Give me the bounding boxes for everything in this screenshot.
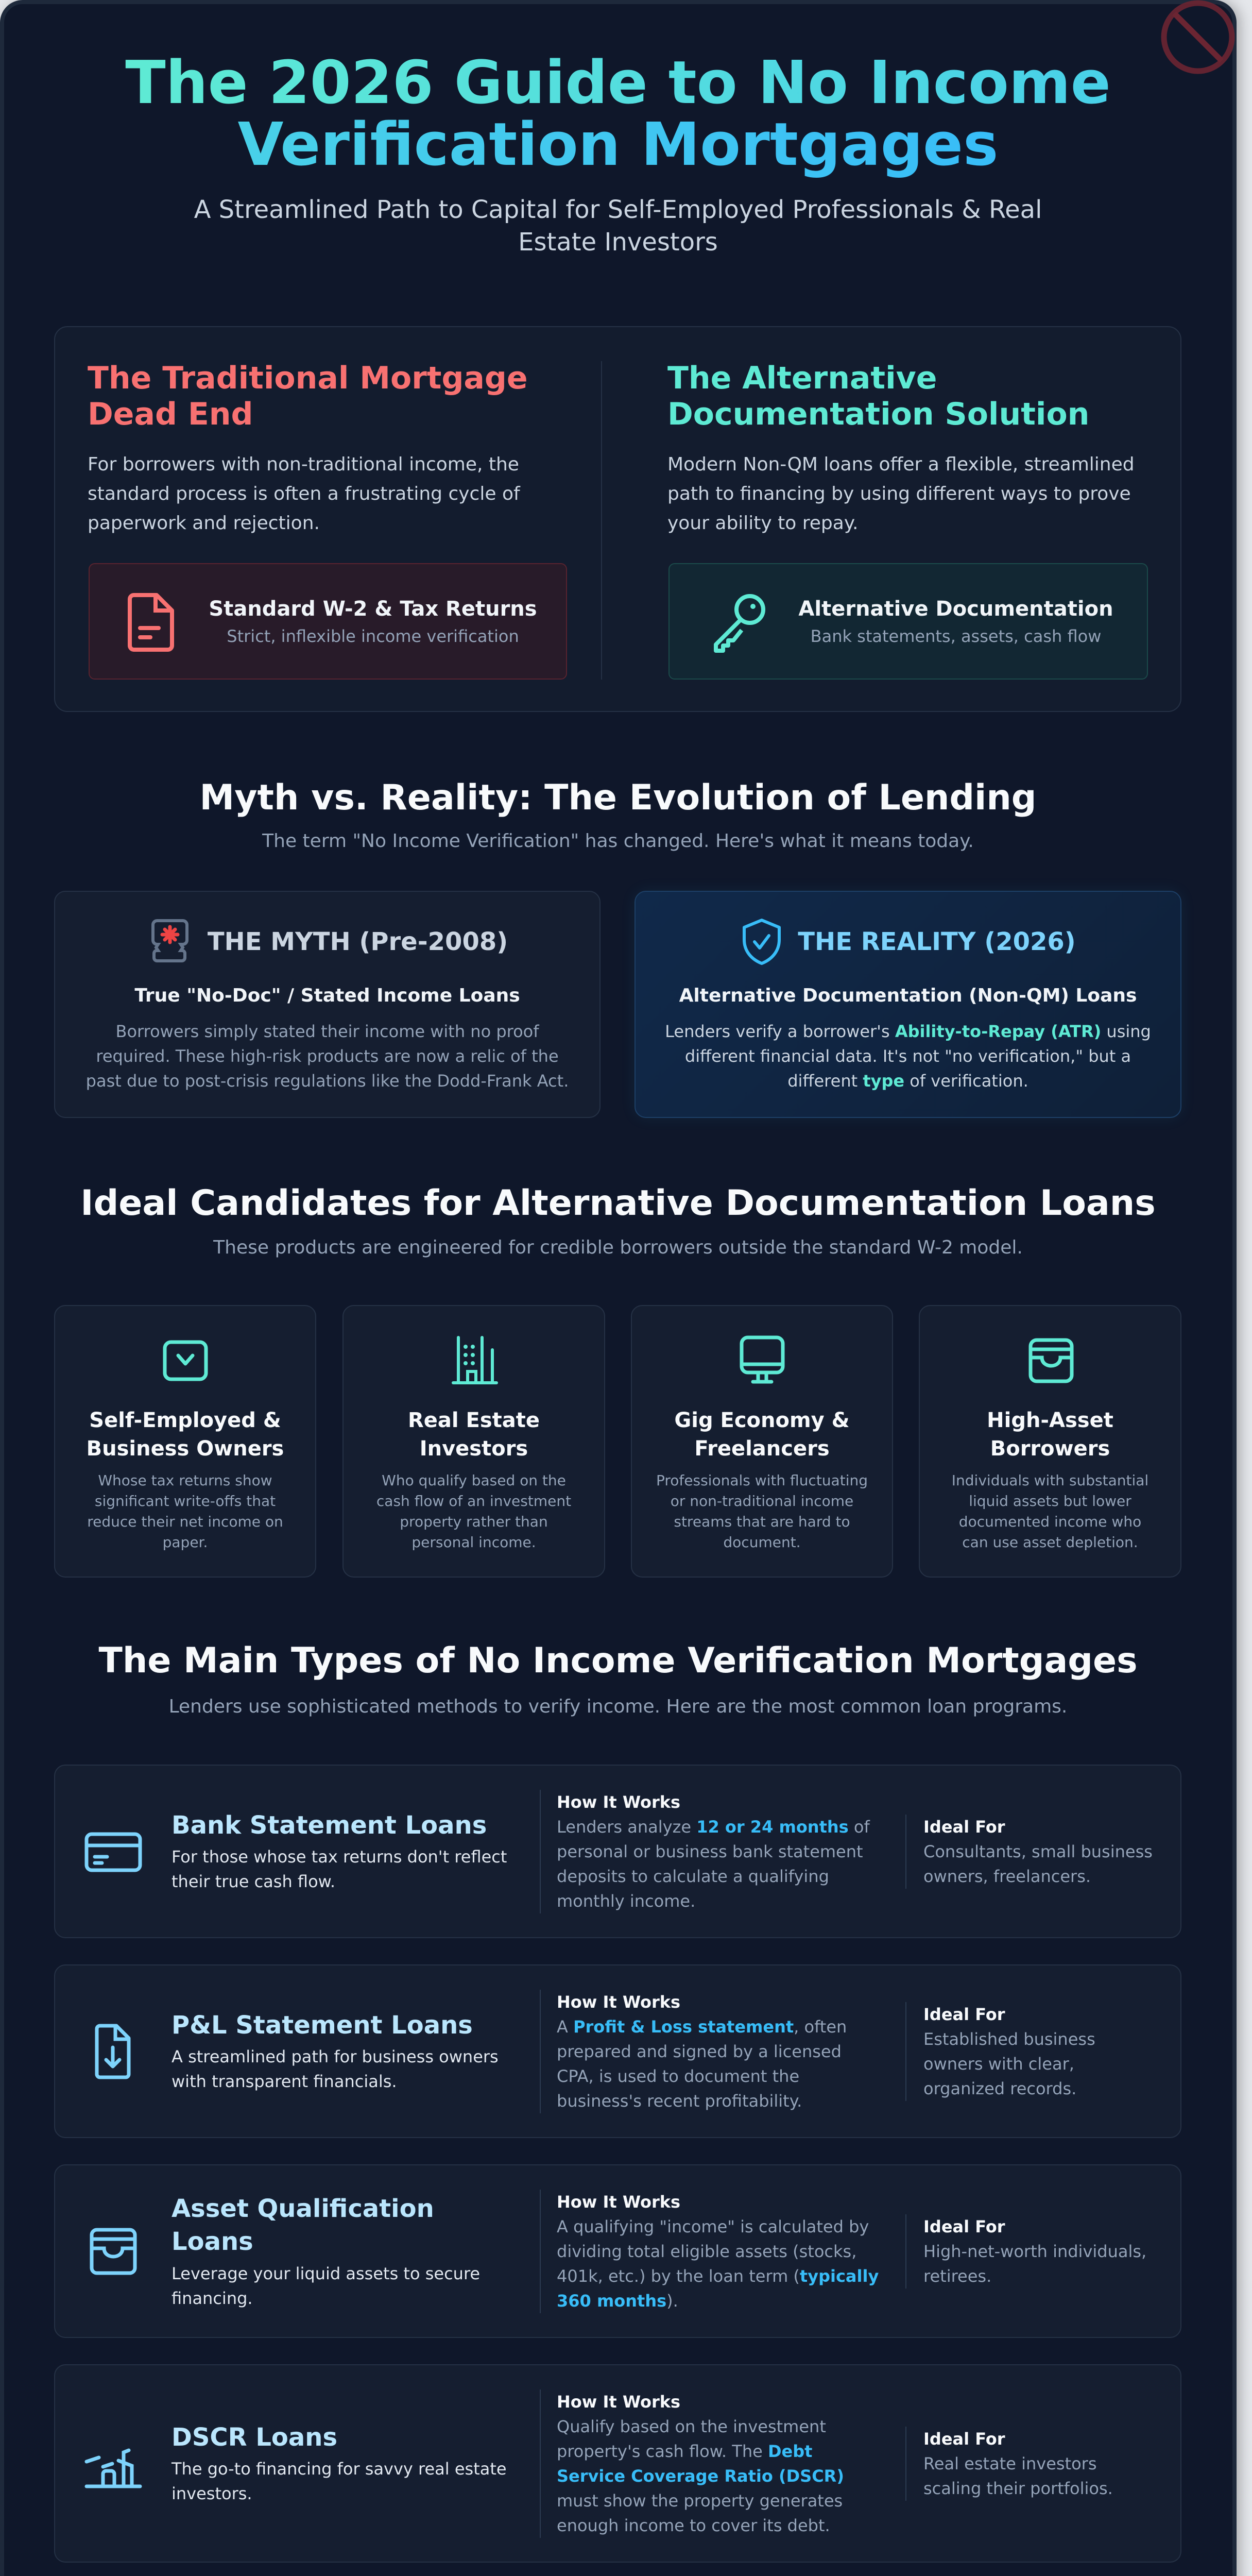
text: real estate desc: personal income. [411, 1534, 536, 1551]
column: P&L ideal for: owners with clear, [923, 2054, 1074, 2073]
subheading: ideal candidates: These products are engineered for credible borrowers outside the standard W-2 model. [213, 1237, 1023, 1258]
text: high-asset desc: documented income who [959, 1513, 1141, 1530]
column: P&L how it works [540, 1990, 905, 2113]
text: gig title: Gig Economy & [674, 1409, 850, 1432]
column: bank statement how it works: personal or business bank statement [557, 1841, 863, 1861]
column: DSCR how it works: How It Works [557, 2392, 680, 2411]
column: P&L ideal for: Ideal For [923, 2004, 1005, 2024]
text: alternative body: your ability to repay. [667, 513, 858, 534]
column: DSCR how it works: Qualify based on the investment [557, 2416, 826, 2436]
text: real estate desc [344, 1470, 604, 1553]
text: high-asset title: High-Asset [987, 1409, 1113, 1432]
text: high-asset desc [920, 1470, 1180, 1553]
column: asset qualification name: financing. [171, 2289, 253, 2308]
text: gig desc [632, 1470, 892, 1553]
column: DSCR ideal for: Ideal For [923, 2429, 1005, 2448]
text: high-asset desc: can use asset depletion. [962, 1534, 1138, 1551]
icon: credit card [84, 1823, 142, 1880]
text: myth subtitle: True "No-Doc" / Stated Income Loans [134, 985, 520, 1006]
panel: the reality [634, 891, 1181, 1118]
icon: property chart [84, 2435, 142, 2493]
card: DSCR loans [54, 2364, 1181, 2563]
column: bank statement ideal for: owners, freelancers. [923, 1866, 1091, 1886]
header: the myth: THE MYTH (Pre-2008) [208, 927, 508, 956]
text: self-employed desc [87, 1472, 283, 1551]
column: asset qualification name: Asset Qualification [171, 2194, 434, 2223]
card: asset qualification loans [54, 2164, 1181, 2338]
subtitle [194, 195, 1042, 257]
column: P&L how it works: How It Works [557, 1992, 680, 2011]
text: standard W-2: Standard W-2 & Tax Returns [209, 597, 537, 621]
text: reality body: Lenders verify a borrower's Ability-to-Repay (ATR) using [665, 1022, 1151, 1041]
column: asset how it works: How It Works [557, 2192, 680, 2211]
icon: briefcase check [163, 1341, 208, 1381]
column: asset how it works: dividing total eligible assets (stocks, [557, 2241, 856, 2261]
column: P&L how it works: prepared and signed by a licensed [557, 2041, 842, 2061]
right column: alternative solution [667, 360, 1148, 680]
column: P&L name: with transparent financials. [171, 2071, 397, 2091]
panel: the myth [54, 891, 601, 1118]
title: Verification Mortgages [238, 110, 998, 179]
text: alternative documentation [798, 597, 1113, 646]
column: P&L how it works: business's recent profitability. [557, 2091, 802, 2110]
column: asset ideal for [905, 2214, 1146, 2289]
card: high-asset [919, 1305, 1181, 1578]
column: DSCR name [55, 2421, 540, 2506]
column: bank statement ideal for: Consultants, small business [923, 1841, 1153, 1861]
text: reality body: different financial data. It's not "no verification," but a [685, 1046, 1131, 1066]
column: asset how it works: 401k, etc.) by the loan term (typically [557, 2266, 879, 2285]
text: alternative body: Modern Non-QM loans offer a flexible, streamlined [667, 454, 1135, 475]
column: P&L ideal for: organized records. [923, 2078, 1076, 2098]
text: self-employed desc: Whose tax returns show [98, 1472, 272, 1489]
heading: main types: The Main Types of No Income Verification Mortgages [98, 1640, 1138, 1681]
column: P&L name [55, 2009, 540, 2094]
card: real estate investors [342, 1305, 605, 1578]
text: real estate desc: cash flow of an investment [376, 1493, 571, 1510]
text: alternative documentation: Bank statements, assets, cash flow [811, 626, 1101, 646]
text: real estate title: Investors [420, 1437, 528, 1461]
text: self-employed desc: paper. [163, 1534, 208, 1551]
text: reality body [665, 1022, 1151, 1091]
text: gig desc: Professionals with fluctuating [656, 1472, 868, 1489]
heading: alternative solution: Documentation Solution [667, 396, 1089, 432]
card: P&L statement loans [54, 1964, 1181, 2138]
subtitle: Estate Investors [518, 228, 718, 257]
text: real estate title: Real Estate [408, 1409, 540, 1432]
column: asset ideal for: High-net-worth individuals, [923, 2241, 1146, 2261]
heading: ideal candidates: Ideal Candidates for Alternative Documentation Loans [80, 1183, 1156, 1224]
text: real estate desc: Who qualify based on the [382, 1472, 566, 1489]
column: DSCR name: DSCR Loans [171, 2422, 337, 2451]
column: DSCR name: The go-to financing for savvy real estate [171, 2459, 507, 2478]
column: P&L how it works: A Profit & Loss statement, often [557, 2016, 847, 2036]
icon: document [128, 593, 174, 652]
text: real estate title [408, 1409, 540, 1461]
column: bank statement name [55, 1809, 540, 1894]
column: DSCR ideal for [905, 2427, 1113, 2501]
column: bank statement name: their true cash flow. [171, 1871, 335, 1891]
column: DSCR how it works: enough income to cover its debt. [557, 2515, 830, 2535]
card: gig economy [631, 1305, 893, 1578]
column: asset ideal for: retirees. [923, 2266, 991, 2285]
text: traditional body: paperwork and rejection. [88, 513, 320, 534]
column: P&L name: P&L Statement Loans [171, 2010, 473, 2039]
text: gig title: Freelancers [694, 1437, 830, 1461]
text: traditional body: standard process is often a frustrating cycle of [88, 483, 520, 504]
text: myth body: required. These high-risk products are now a relic of the [96, 1046, 559, 1066]
text: traditional body [88, 454, 520, 534]
icon: broken badge [151, 919, 188, 962]
column: DSCR how it works: property's cash flow. The Debt [557, 2441, 812, 2461]
heading: alternative solution [667, 360, 1089, 432]
subheading: myth vs reality: The term "No Income Verification" has changed. Here's what it means today. [262, 831, 974, 852]
icon: monitor [738, 1334, 787, 1386]
callout: standard W-2 [89, 563, 567, 680]
column: asset qualification name: Loans [171, 2227, 253, 2256]
column: bank statement how it works [540, 1790, 905, 1913]
card: self-employed [54, 1305, 316, 1578]
heading: traditional dead end: The Traditional Mortgage [88, 360, 528, 396]
text: myth body: past due to post-crisis regulations like the Dodd-Frank Act. [86, 1071, 569, 1091]
icon: file download [84, 2023, 142, 2080]
column: DSCR ideal for: Real estate investors [923, 2453, 1097, 2473]
column: DSCR name: investors. [171, 2483, 252, 2503]
text: self-employed desc: significant write-offs that [95, 1493, 276, 1510]
header: the reality [743, 919, 1076, 965]
left column: traditional mortgage [88, 360, 567, 680]
heading: traditional dead end: Dead End [88, 396, 253, 432]
heading: myth vs reality: Myth vs. Reality: The Evolution of Lending [200, 777, 1036, 818]
callout: alternative documentation [668, 563, 1148, 680]
subtitle: A Streamlined Path to Capital for Self-Employed Professionals & Real [194, 195, 1042, 224]
column: DSCR how it works [540, 2389, 905, 2538]
subheading: main types: Lenders use sophisticated methods to verify income. Here are the most common loan programs. [169, 1696, 1067, 1717]
text: self-employed title [87, 1409, 284, 1461]
text: gig desc: streams that are hard to [674, 1513, 850, 1530]
column: asset qualification name: Leverage your liquid assets to secure [171, 2264, 480, 2283]
title [125, 48, 1111, 179]
text: high-asset desc: liquid assets but lower [969, 1493, 1131, 1510]
text: self-employed desc: reduce their net income on [87, 1513, 283, 1530]
text: self-employed title: Business Owners [87, 1437, 284, 1461]
icon: building [452, 1336, 498, 1384]
column: P&L how it works: CPA, is used to document the [557, 2066, 799, 2086]
text: traditional body: For borrowers with non-traditional income, the [88, 454, 519, 475]
header: the reality: THE REALITY (2026) [798, 927, 1076, 956]
text: self-employed title: Self-Employed & [89, 1409, 281, 1432]
text: myth body: Borrowers simply stated their income with no proof [115, 1022, 539, 1041]
column: asset ideal for: Ideal For [923, 2216, 1005, 2236]
icon: key [714, 594, 765, 653]
column: P&L name: A streamlined path for business owners [171, 2046, 499, 2066]
text: real estate desc: property rather than [400, 1513, 548, 1530]
column: asset how it works [540, 2190, 905, 2313]
column: bank statement ideal for [905, 1815, 1153, 1889]
text: reality subtitle: Alternative Documentation (Non-QM) Loans [679, 985, 1137, 1006]
column: bank statement name: Bank Statement Loans [171, 1810, 487, 1839]
text: gig desc: or non-traditional income [671, 1493, 853, 1510]
column: bank statement how it works: Lenders analyze 12 or 24 months of [557, 1817, 870, 1836]
column: DSCR ideal for: scaling their portfolios. [923, 2478, 1113, 2498]
icon: archive [84, 2223, 142, 2280]
heading: alternative solution: The Alternative [667, 360, 937, 396]
card: bank statement loans [54, 1765, 1181, 1938]
column: DSCR how it works: must show the property generates [557, 2490, 843, 2510]
icon: shield check [743, 919, 781, 965]
text: alternative body [667, 454, 1135, 534]
text: reality body: different type of verification. [787, 1071, 1028, 1091]
icon: decorative prohibition sign [1161, 0, 1235, 74]
panel: traditional vs alternative [54, 326, 1181, 712]
header: the myth [151, 919, 508, 962]
column: bank statement name: For those whose tax returns don't reflect [171, 1846, 507, 1866]
text: high-asset title: Borrowers [990, 1437, 1110, 1461]
icon: archive box [1026, 1336, 1076, 1385]
text: gig desc: document. [723, 1534, 801, 1551]
text: standard W-2 [209, 597, 537, 646]
heading: traditional dead end [88, 360, 528, 432]
column: bank statement ideal for: Ideal For [923, 1817, 1005, 1836]
column: bank statement how it works: monthly income. [557, 1891, 695, 1910]
column: bank statement how it works: How It Works [557, 1792, 680, 1811]
column: DSCR how it works: Service Coverage Ratio (DSCR) [557, 2466, 844, 2485]
text: gig title [632, 1406, 892, 1463]
column: P&L ideal for [905, 2002, 1095, 2101]
column: asset how it works: 360 months). [557, 2291, 678, 2310]
text: standard W-2: Strict, inflexible income verification [227, 626, 519, 646]
text: high-asset desc: Individuals with substantial [952, 1472, 1148, 1489]
column: bank statement how it works: deposits to calculate a qualifying [557, 1866, 829, 1886]
text: alternative documentation: Alternative Documentation [798, 597, 1113, 621]
text: myth body [86, 1022, 569, 1091]
column: asset qualification name [55, 2192, 540, 2310]
title: The 2026 Guide to No Income [125, 48, 1111, 117]
column: asset how it works: A qualifying "income" is calculated by [557, 2216, 869, 2236]
text: high-asset title [920, 1406, 1180, 1463]
column: P&L ideal for: Established business [923, 2029, 1095, 2048]
text: alternative body: path to financing by using different ways to prove [667, 483, 1131, 504]
